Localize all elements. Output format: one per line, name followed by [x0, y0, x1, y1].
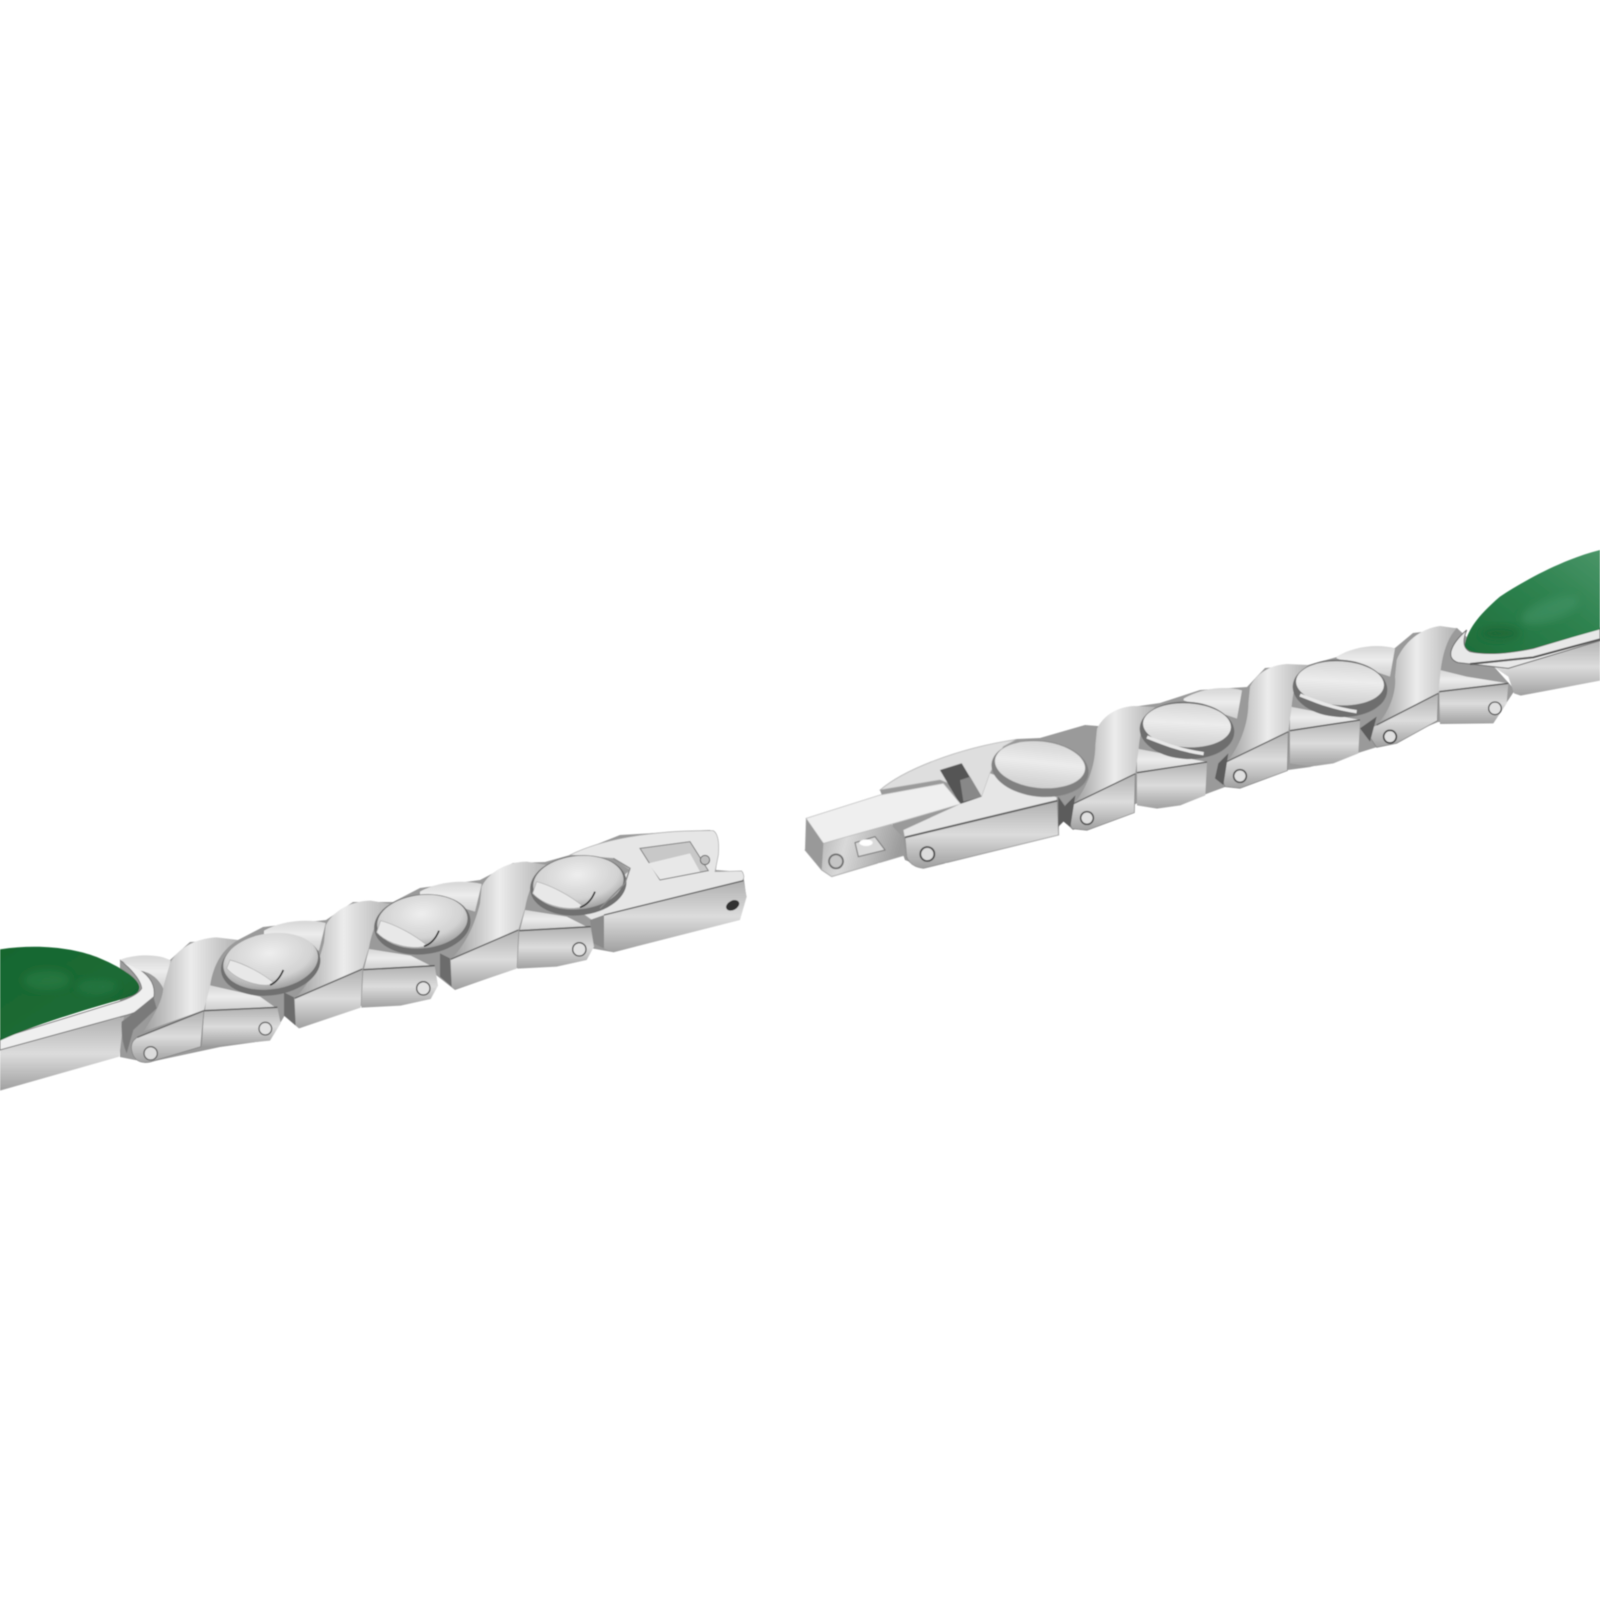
right clasp	[805, 736, 1091, 877]
right jade stone setting	[1451, 550, 1600, 696]
left jade stone setting	[0, 947, 154, 1091]
right link 2	[1215, 646, 1395, 788]
left bracelet segment	[0, 830, 747, 1091]
left link 2	[264, 889, 474, 1028]
left link 1	[120, 927, 324, 1062]
left link 3	[420, 850, 630, 989]
left clasp	[570, 831, 747, 952]
right bracelet segment	[805, 550, 1600, 877]
right segment silhouette	[880, 628, 1515, 868]
left segment silhouette	[120, 830, 746, 1062]
right link 1	[1062, 688, 1242, 830]
right link 3	[1360, 626, 1508, 747]
